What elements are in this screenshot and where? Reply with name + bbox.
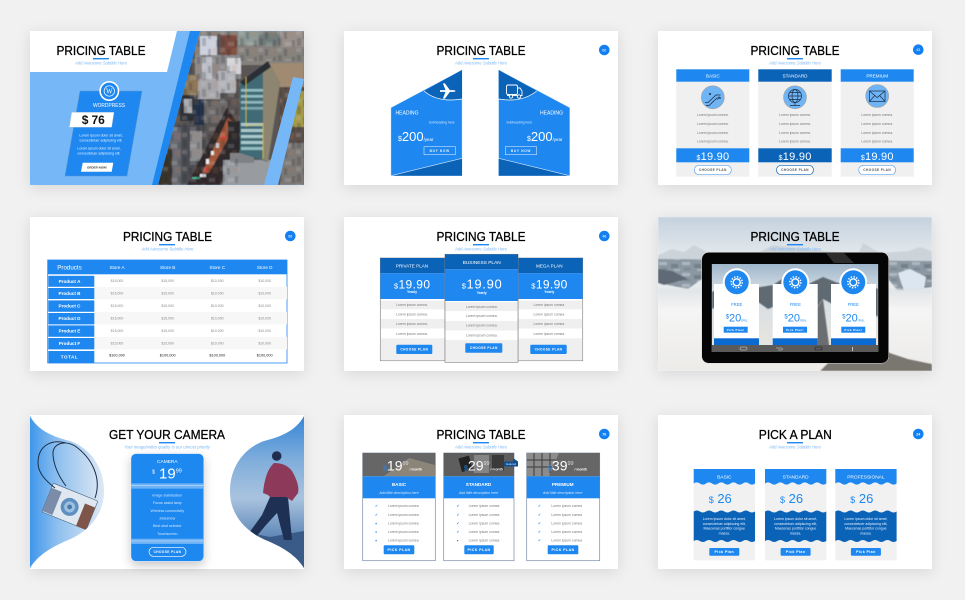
feature list: Wireless connectivity <box>151 509 184 513</box>
card: standard: consectetuer adipiscing elit, <box>774 522 817 526</box>
card: standard: ✔ <box>456 504 460 508</box>
subtitle: Add Awesome Subtitle Here <box>454 444 507 450</box>
card: professional <box>835 469 897 560</box>
price: $ <box>152 470 155 476</box>
page badge: 60 <box>602 48 606 52</box>
tablet screen <box>712 264 878 352</box>
card: standard: ✔ <box>456 513 460 517</box>
panel: slide 8 photo header plans <box>344 415 618 569</box>
card: basic: $19 <box>383 458 402 474</box>
title underline <box>473 58 489 59</box>
card: premium <box>527 453 600 561</box>
column: private plan: Lorem ipsum comea. <box>396 303 428 307</box>
title: GET YOUR CAMERA <box>109 427 225 442</box>
table header: Store D <box>257 265 273 270</box>
table values: $15,000 <box>161 316 174 320</box>
title: PRICING TABLE <box>436 427 526 442</box>
card: free plan 2: $ <box>784 314 788 320</box>
table values: $15,000 <box>111 329 123 333</box>
card: standard: Pick Plan <box>786 550 805 554</box>
card: premium: ✔ <box>538 538 541 542</box>
card: professional: Lorem ipsum dolor sit amet, <box>844 517 888 521</box>
column: standard: Lorem ipsum comea. <box>779 131 811 135</box>
column: mega plan: Yearly <box>544 290 554 294</box>
photo: hiker in curved shape <box>226 413 306 568</box>
plan name: CAMERA <box>157 459 178 465</box>
subtitle: Your image/video quality is our utmost priority <box>124 444 211 450</box>
column: mega plan: $19.90 <box>531 277 568 291</box>
card: premium: ✔ <box>538 513 541 517</box>
card: basic: ● <box>375 522 377 526</box>
table values: $100,000 <box>209 353 225 357</box>
card: standard: Lorem ipsum comea <box>469 504 499 508</box>
column: premium: Lorem ipsum comea. <box>861 122 893 126</box>
table values: $10,000 <box>211 329 224 333</box>
icon: plane <box>440 83 456 99</box>
card: standard: Lorem ipsum comea <box>469 538 499 542</box>
title underline <box>787 58 803 59</box>
table values <box>109 279 273 357</box>
card: free plan 1 <box>714 268 759 345</box>
card: basic: Lorem ipsum comea <box>388 504 419 508</box>
column: mega plan: MEGA PLAN <box>536 264 563 268</box>
icon: truck <box>506 85 522 98</box>
table values: $10,000 <box>211 292 224 296</box>
feature list: slideshow <box>159 516 176 520</box>
card: standard: Lorem ipsum comea <box>469 522 499 526</box>
column: business plan: Yearly <box>477 291 487 295</box>
table values: $15,000 <box>111 279 123 283</box>
panel: slide 7 get your camera <box>30 413 306 569</box>
description: Lorem ipsum dolor sit amet, <box>79 134 123 138</box>
column: basic <box>676 69 749 177</box>
card: free plan 2: 20 <box>788 312 800 324</box>
column: premium: Lorem ipsum comea. <box>861 140 893 144</box>
table values: $100,000 <box>160 353 176 357</box>
column: standard <box>758 69 832 177</box>
column: mega plan: Lorem ipsum comea. <box>533 322 565 326</box>
subtitle: Add Awesome Subtitle Here <box>768 246 821 252</box>
card: basic: Maecenas porttitor congue <box>704 526 745 530</box>
decorative band <box>131 539 204 544</box>
card: basic: Lorem ipsum comea <box>388 530 419 534</box>
column: mega plan: Lorem ipsum comea. <box>533 332 565 336</box>
title underline <box>93 58 109 59</box>
icon: wordpress logo: W <box>106 88 113 96</box>
column: business plan: BUSINESS PLAN <box>463 260 501 266</box>
title: PRICING TABLE <box>56 43 146 58</box>
card: standard: Maecenas porttitor congue <box>775 526 816 530</box>
row labels: Product B <box>59 291 81 296</box>
card: premium: ✔ <box>538 530 541 534</box>
description: consectetuer adipiscing elit. <box>78 152 121 156</box>
icon: escalator <box>701 86 724 109</box>
card: free plan 3: FREE <box>848 302 859 307</box>
row labels: Product E <box>59 328 80 333</box>
photo: city aerial view <box>150 31 310 185</box>
card: basic: Lorem ipsum comea <box>388 538 419 542</box>
title: PRICING TABLE <box>436 229 526 244</box>
table values: $10,000 <box>211 342 224 346</box>
card: professional: PROFESSIONAL <box>847 475 885 481</box>
column: business plan <box>445 254 518 362</box>
card: basic: ● <box>375 538 377 542</box>
feature list: Best shot selector <box>153 524 182 528</box>
column: private plan: Lorem ipsum comea. <box>396 312 428 316</box>
card: basic: Lorem ipsum dolor sit amet, <box>703 517 746 521</box>
blue diagonal band <box>152 31 200 185</box>
column: basic: Lorem ipsum comea. <box>697 140 729 144</box>
panel: slide 2 two-card pricing <box>344 31 618 185</box>
card: standard: 99 <box>483 461 490 467</box>
card: premium: 99 <box>567 461 574 467</box>
card: basic: BASIC <box>717 475 732 481</box>
card: professional: $ 26 <box>850 491 873 506</box>
column: business plan: Lorem ipsum comea. <box>466 314 498 318</box>
column: premium: Lorem ipsum comea. <box>861 113 893 117</box>
header area <box>30 31 177 72</box>
table values: $10,000 <box>258 342 271 346</box>
column: standard: CHOOSE PLAN <box>781 168 809 172</box>
title: PRICING TABLE <box>123 229 212 244</box>
column: premium: CHOOSE PLAN <box>863 168 891 172</box>
row labels: Product C <box>59 303 81 308</box>
photo: snowy mountains <box>658 217 932 371</box>
title: PRICING TABLE <box>750 229 840 244</box>
card: basic: ✔ <box>375 504 378 508</box>
title: PICK A PLAN <box>759 427 832 442</box>
panel: slide 1 wordpress pricing <box>30 31 310 185</box>
feature list: Focus assist lamp <box>153 501 182 505</box>
column: business plan: Lorem ipsum comea. <box>466 305 498 309</box>
title underline <box>473 244 489 245</box>
column: basic: Lorem ipsum comea. <box>697 122 729 126</box>
page badge: 48 <box>602 234 606 238</box>
card: free plan 2: FREE <box>790 302 801 307</box>
icon: gear <box>781 268 809 296</box>
icon: globe <box>784 86 806 109</box>
table values: $10,000 <box>211 279 224 283</box>
plan name: WORDPRESS <box>93 103 126 109</box>
table values: $10,000 <box>258 316 271 320</box>
card: standard <box>765 469 826 560</box>
table values: $15,000 <box>161 329 174 333</box>
table values: $15,000 <box>161 342 174 346</box>
page badge: 43 <box>916 48 920 52</box>
light blue stripe right <box>264 77 304 185</box>
column: standard: Lorem ipsum comea. <box>779 113 811 117</box>
heading: HEADING <box>540 110 563 116</box>
card: free plan 1: /mo. <box>741 318 748 322</box>
table values: $15,000 <box>111 342 123 346</box>
page badge: 66 <box>288 234 292 238</box>
column: standard: STANDARD <box>783 73 808 78</box>
table values: $15,000 <box>111 292 123 296</box>
feature list <box>151 494 184 536</box>
row labels <box>48 276 94 363</box>
panel: slide 6 tablet mockup <box>658 217 932 371</box>
table values: $10,000 <box>258 279 271 283</box>
button: BUY NOW <box>430 149 450 153</box>
card: standard: PICK PLAN <box>468 548 490 552</box>
card: basic: consectetuer adipiscing elit, <box>703 522 746 526</box>
column: standard: Lorem ipsum comea. <box>779 122 811 126</box>
card: standard: $ 26 <box>780 491 803 506</box>
tablet nav bar <box>712 345 878 352</box>
column: premium: Lorem ipsum comea. <box>861 131 893 135</box>
description: Lorem ipsum dolor sit amet, <box>77 147 121 151</box>
card: free plan 2: /mo. <box>800 318 807 322</box>
page badge <box>599 231 610 241</box>
card: premium: Add little description here <box>542 491 582 495</box>
card: premium: Lorem ipsum comea <box>551 522 582 526</box>
column: premium: $19.90 <box>861 151 894 163</box>
card: basic <box>694 469 755 560</box>
title underline <box>787 442 803 443</box>
button: BUY NOW <box>511 149 531 153</box>
panel: slide 3 three icon plans <box>658 31 932 185</box>
card: premium: $39 <box>548 458 567 474</box>
card: free plan 3: /mo. <box>858 318 865 322</box>
column: private plan: PRIVATE PLAN <box>396 264 428 268</box>
column: private plan: Yearly <box>407 290 417 294</box>
column: private plan: Lorem ipsum comea. <box>396 332 428 336</box>
title: PRICING TABLE <box>750 43 840 58</box>
table header: Store A <box>109 265 125 270</box>
card: premium: Lorem ipsum comea <box>551 513 582 517</box>
column: mega plan: Lorem ipsum comea. <box>533 312 565 316</box>
column: basic: BASIC <box>706 73 720 78</box>
card: premium: / month <box>574 468 587 472</box>
card: free plan 1: $ <box>726 314 730 320</box>
table values: $15,000 <box>161 304 174 308</box>
card: premium: ✔ <box>538 522 541 526</box>
card: premium: PREMIUM <box>552 482 574 487</box>
card: basic: PICK PLAN <box>388 548 410 552</box>
table header: Store C <box>210 265 226 270</box>
card: left plane plan <box>391 70 462 176</box>
column: mega plan <box>518 258 583 361</box>
title underline <box>159 442 175 443</box>
table values: $15,000 <box>111 316 123 320</box>
icon: gear <box>839 268 867 296</box>
title underline <box>159 244 175 245</box>
price: $200/year <box>398 129 434 144</box>
card: free plan 3: Pick Plan! <box>844 328 862 332</box>
card: standard: Lorem ipsum dolor sit amet, <box>774 517 817 521</box>
card: premium: Lorem ipsum comea <box>551 530 582 534</box>
hiker <box>249 451 298 540</box>
column: business plan: CHOOSE PLAN <box>470 346 498 350</box>
title: PRICING TABLE <box>436 43 526 58</box>
column: standard: Lorem ipsum comea. <box>779 140 811 144</box>
card: standard: / month <box>490 468 503 472</box>
price: 99 <box>176 469 182 475</box>
description: consectetuer adipiscing elit. <box>80 138 123 142</box>
column: basic: $19.90 <box>696 151 729 163</box>
tablet <box>702 252 889 363</box>
card: basic: ✔ <box>375 513 378 517</box>
card: premium: ✔ <box>538 504 541 508</box>
column: premium: PREMIUM <box>866 73 888 78</box>
column: basic: Lorem ipsum comea. <box>697 113 729 117</box>
subheading: Subheading here <box>429 120 455 124</box>
column: basic: Lorem ipsum comea. <box>697 131 729 135</box>
column: private plan: Lorem ipsum comea. <box>396 322 428 326</box>
table header: Store B <box>160 265 175 270</box>
column: private plan: $19.90 <box>394 277 430 291</box>
description <box>77 134 123 156</box>
photo: camera in curved shape <box>30 413 110 568</box>
row labels: Product F <box>59 341 80 346</box>
card: basic: BASIC <box>392 482 407 487</box>
card: professional: consectetuer adipiscing elit, <box>844 522 887 526</box>
column: business plan: Lorem ipsum comea. <box>466 324 498 328</box>
button: CHOOSE PLAN <box>154 550 182 554</box>
card: standard: Lorem ipsum comea <box>469 513 499 517</box>
column: premium <box>841 69 914 177</box>
table values: $10,000 <box>211 304 224 308</box>
card: basic: Lorem ipsum comea <box>388 513 419 517</box>
price: 19 <box>155 466 176 483</box>
page badge <box>599 429 610 439</box>
heading: HEADING <box>396 110 419 116</box>
card: basic: / month <box>409 468 422 472</box>
card: right truck plan <box>499 70 570 176</box>
card: basic: massa. <box>719 531 730 535</box>
panel: slide 4 product table <box>30 217 304 371</box>
featured tag: featured <box>506 462 517 466</box>
subtitle: Add Awesome Subtitle Here <box>768 60 821 66</box>
column: mega plan: Lorem ipsum comea. <box>533 303 565 307</box>
table <box>48 260 287 363</box>
card: free plan 2 <box>773 268 818 345</box>
title underline <box>473 442 489 443</box>
card: basic: Lorem ipsum comea <box>388 522 419 526</box>
table values: $100,000 <box>257 353 273 357</box>
feature list: Touchscreen <box>157 532 177 536</box>
column: private plan: CHOOSE PLAN <box>400 348 428 352</box>
card: professional: massa. <box>860 531 872 535</box>
column: mega plan: CHOOSE PLAN <box>535 348 563 352</box>
page badge <box>285 231 296 241</box>
page badge <box>913 429 924 439</box>
subtitle: Add Awesome Subtitle Here <box>454 60 507 66</box>
subtitle: Add Awesome Subtitle Here <box>454 246 507 252</box>
page badge <box>599 45 610 55</box>
card: standard <box>444 453 518 561</box>
card: basic: ● <box>375 530 377 534</box>
title underline <box>787 244 803 245</box>
order button: ORDER NOW! <box>87 166 107 170</box>
card: free plan 1: FREE <box>731 302 742 307</box>
card: premium: PICK PLAN <box>552 548 574 552</box>
card: basic <box>363 453 435 561</box>
decorative band <box>131 483 204 489</box>
column: standard: $19.90 <box>779 151 811 163</box>
table values: $10,000 <box>258 329 271 333</box>
panel: slide 5 three plan columns <box>344 217 618 371</box>
icon: gear <box>723 268 751 296</box>
card: free plan 1: Pick Plan! <box>727 328 745 332</box>
card: standard: STANDARD <box>466 482 492 487</box>
card: free plan 2: Pick Plan! <box>786 328 804 332</box>
card: camera plan <box>131 454 204 561</box>
card: standard: ● <box>456 538 459 542</box>
column: business plan: $19.90 <box>462 276 502 291</box>
price flag: $ 76 <box>82 113 105 127</box>
price: $200/year <box>527 129 563 144</box>
card: free plan 1: 20 <box>729 312 741 324</box>
table values: $100,000 <box>109 353 125 357</box>
camera <box>42 483 98 530</box>
table values: $15,000 <box>161 292 174 296</box>
card: basic: Add little description here <box>378 491 419 495</box>
row labels: TOTAL <box>61 354 78 360</box>
subtitle: Add Awesome Subtitle Here <box>141 246 194 252</box>
card: wordpress <box>65 81 142 176</box>
row labels: Product A <box>59 279 81 284</box>
subtitle: Add Awesome Subtitle Here <box>768 444 821 450</box>
column: business plan: Lorem ipsum comea. <box>466 334 498 338</box>
subtitle: Add Awesome Subtitle Here <box>74 60 127 66</box>
subheading: Subheading here <box>506 120 532 124</box>
card: free plan 3: $ <box>842 314 846 320</box>
column: private plan <box>380 258 445 361</box>
card: basic: Pick Plan <box>715 550 734 554</box>
table values: $10,000 <box>258 292 271 296</box>
table values: $15,000 <box>161 279 174 283</box>
card: basic: $ 26 <box>709 491 732 506</box>
card: free plan 3: 20 <box>846 312 858 324</box>
page badge: 24 <box>916 432 920 436</box>
card: professional: Maecenas porttitor congue <box>845 526 887 530</box>
card: free plan 3 <box>831 268 876 345</box>
table values: $10,000 <box>258 304 271 308</box>
table values: $10,000 <box>211 316 224 320</box>
card: standard: STANDARD <box>783 475 809 481</box>
card: standard: Add little description here <box>458 491 498 495</box>
page badge <box>913 44 924 55</box>
panel: slide 9 pick a plan <box>658 415 932 569</box>
icon: envelope <box>866 84 889 108</box>
table values: $15,000 <box>111 304 123 308</box>
card: professional: Pick Plan <box>856 550 876 554</box>
column: basic: CHOOSE PLAN <box>699 168 727 172</box>
card: standard: Lorem ipsum comea <box>469 530 499 534</box>
card: standard: massa. <box>790 531 801 535</box>
table header: Products <box>57 264 82 272</box>
feature list: Image stabilization <box>152 494 182 498</box>
table header <box>48 260 287 274</box>
card: basic: 99 <box>402 461 409 467</box>
row labels: Product D <box>59 316 81 321</box>
card: premium: Lorem ipsum comea <box>551 504 582 508</box>
card: standard: ✔ <box>456 522 460 526</box>
card: premium: Lorem ipsum comea <box>551 538 582 542</box>
card: standard: $29 <box>464 458 483 474</box>
card: standard: ✔ <box>456 530 460 534</box>
page badge: 76 <box>602 432 606 436</box>
